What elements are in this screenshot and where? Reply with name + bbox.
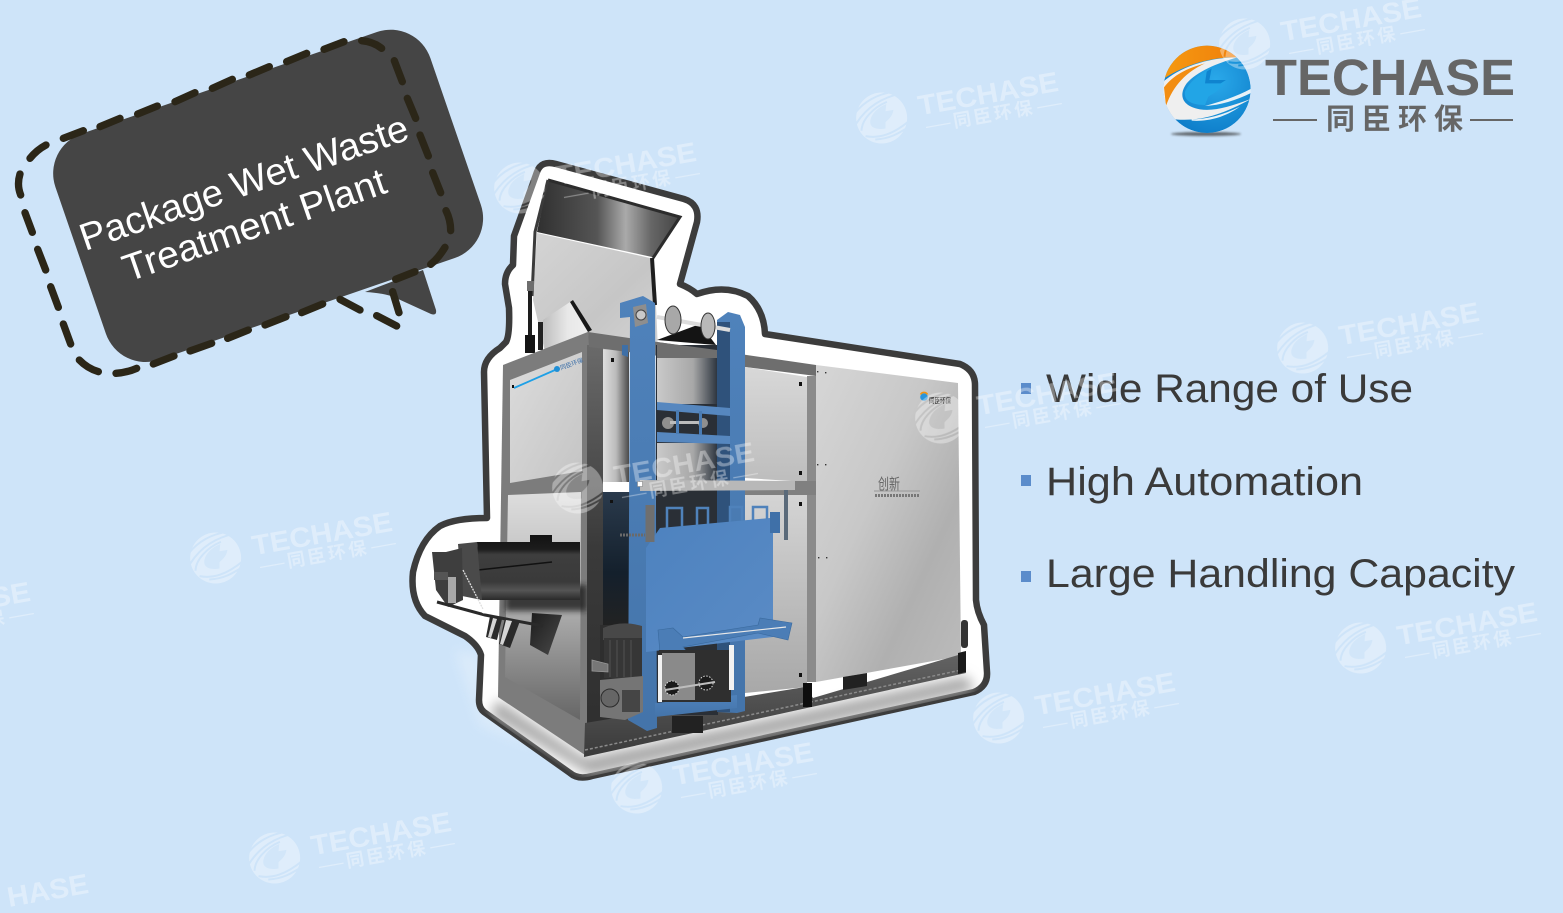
lower opening with sprockets <box>658 645 734 702</box>
watermark 4: 同臣环保 <box>1372 324 1455 363</box>
watermark 1: TECHASE <box>915 66 1061 121</box>
front left column <box>587 345 630 750</box>
watermark 7: TECHASE <box>249 506 395 561</box>
logo Chinese name: 同臣环保 <box>1326 96 1463 138</box>
watermark 2: 同臣环保 <box>1314 20 1397 59</box>
horizontal steel bar <box>640 480 795 491</box>
right cabinet panel: 同臣环保 <box>929 395 951 405</box>
watermark 9: 同臣环保 <box>1430 624 1513 663</box>
blue hanging plate <box>620 490 786 652</box>
feature: large handling capacity: Large Handling Capacity <box>1046 552 1515 596</box>
dashed outline <box>18 41 451 373</box>
right cabinet panel: 创新 <box>878 476 900 493</box>
hopper lid and chute <box>525 180 680 353</box>
inner frame section with steel and rollers <box>656 324 718 715</box>
watermark 13: HASE <box>5 868 91 913</box>
watermark 4 <box>1277 302 1483 374</box>
watermark 12: 同臣环保 <box>344 834 427 873</box>
watermark 10: 同臣环保 <box>1068 694 1151 733</box>
callout: product title bubble <box>18 18 494 373</box>
top shaft with rollers <box>633 304 730 339</box>
watermark 6: 同臣环保 <box>647 464 730 503</box>
watermark 5 <box>915 372 1121 444</box>
blue frame <box>620 296 745 731</box>
watermark 1: 同臣环保 <box>951 94 1034 133</box>
white square tag on bar <box>638 482 642 486</box>
watermark 7 <box>190 512 396 584</box>
sticker outline around machine <box>412 163 987 777</box>
watermark 3: TECHASE <box>553 136 699 191</box>
watermark 9: TECHASE <box>1394 596 1540 651</box>
logo wordmark: TECHASE <box>1265 49 1515 106</box>
watermark 10: TECHASE <box>1032 666 1178 721</box>
right cabinet panel <box>816 365 961 682</box>
watermark 11 <box>611 742 817 814</box>
side wall, left face <box>498 332 590 755</box>
middle panels <box>588 332 816 693</box>
soft glow below sticker <box>455 650 540 750</box>
watermark 6: TECHASE <box>611 436 757 491</box>
discharge conveyor <box>432 535 580 655</box>
machine shadow on sticker <box>490 676 975 775</box>
logo rule lines <box>1273 119 1513 121</box>
watermark 8 <box>0 576 36 649</box>
base plinth <box>584 620 968 757</box>
white line on bracket <box>683 627 786 638</box>
watermark 6 <box>552 442 758 514</box>
blue bracket under plate <box>658 618 792 653</box>
watermark 12 <box>249 812 455 884</box>
watermark 11: TECHASE <box>670 736 816 791</box>
gear motor <box>592 623 643 720</box>
watermark 12: TECHASE <box>308 806 454 861</box>
watermark 2 <box>1215 0 1427 76</box>
company logo <box>1162 44 1515 138</box>
watermark 3 <box>494 142 700 214</box>
watermark 4: TECHASE <box>1336 296 1482 351</box>
watermark 5: TECHASE <box>974 366 1120 421</box>
callout title text: Package Wet Waste <box>74 107 414 260</box>
watermark 10 <box>973 672 1179 744</box>
feature: wide range of use: Wide Range of Use <box>1046 367 1413 411</box>
watermark 5: 同臣环保 <box>1010 394 1093 433</box>
feature: high automation: High Automation <box>1046 460 1363 504</box>
logo globe icon <box>1162 44 1252 136</box>
watermark 7: 同臣环保 <box>285 534 368 573</box>
watermark 3: 同臣环保 <box>589 164 672 203</box>
bubble body <box>42 18 494 373</box>
machine illustration <box>432 180 968 757</box>
callout title text: Treatment Plant <box>117 161 392 291</box>
watermark 9 <box>1335 602 1541 674</box>
watermark 11: 同臣环保 <box>706 764 789 803</box>
feature list <box>1021 367 1515 596</box>
side wall, left face: 同臣环保 <box>559 356 584 372</box>
watermark 1 <box>856 72 1062 144</box>
